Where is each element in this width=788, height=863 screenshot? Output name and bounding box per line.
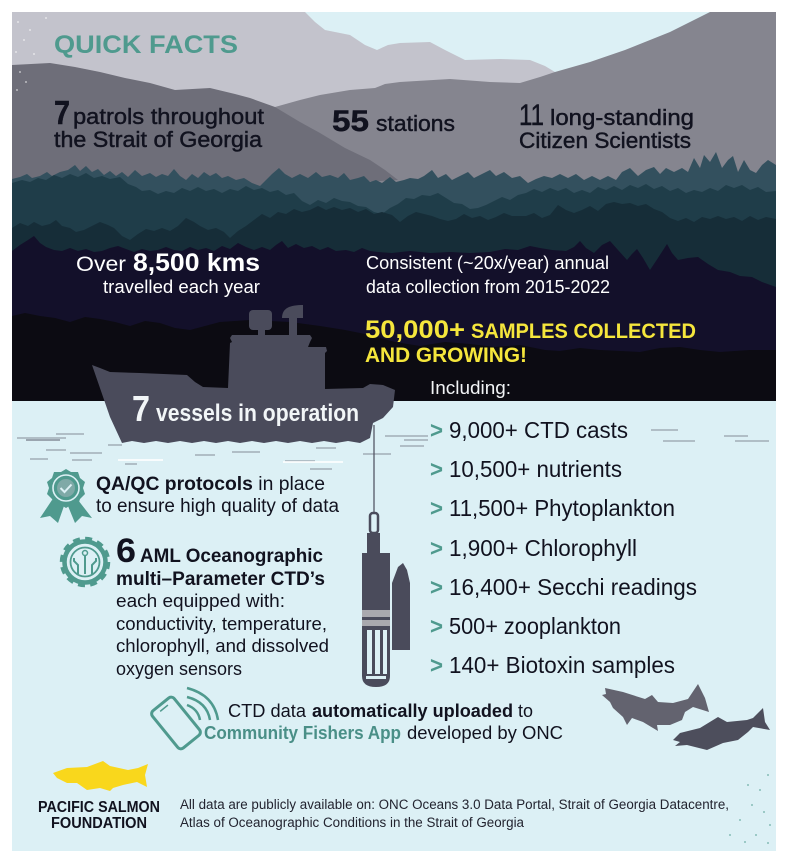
label: vessels in operation — [132, 388, 359, 429]
fact: stations — [332, 105, 455, 138]
fact: annual data collection — [366, 253, 610, 297]
text: AML CTD description — [116, 532, 329, 679]
fact: kilometres travelled: 8,500 kms — [133, 249, 260, 277]
text: CTD data upload: automatically uploaded — [312, 700, 513, 721]
text: AML CTD description: oxygen sensors — [116, 658, 242, 679]
fact: patrols: patrols throughout — [73, 104, 264, 129]
list item: zooplankton: > — [430, 613, 443, 639]
text: CTD data upload: to — [518, 700, 533, 721]
text: QA/QC protocols — [96, 474, 339, 517]
fact: samples collected: SAMPLES COLLECTED — [471, 320, 696, 343]
list item: biotoxin samples: 140+ Biotoxin samples — [449, 652, 675, 678]
text: data availability note: All data are publicly available on: ONC Oceans 3.0 Data Portal, Strait of Georgia Datacentre, — [180, 797, 729, 812]
list item: CTD casts: 9,000+ CTD casts — [449, 417, 628, 443]
text: CTD data upload: developed by ONC — [407, 722, 563, 743]
sample list — [430, 417, 697, 678]
fact: citizen scientists — [519, 99, 694, 153]
icon: CTD instrument on cable — [362, 425, 410, 687]
text: CTD data upload: Community Fishers App — [204, 722, 401, 743]
fact: samples collected: AND GROWING! — [365, 344, 527, 367]
label: including: Including: — [430, 378, 511, 398]
tree line: rear ridge — [12, 202, 776, 310]
logo text: Pacific Salmon Foundation — [38, 799, 160, 832]
list item: phytoplankton: > — [430, 495, 443, 521]
list item: secchi readings: > — [430, 574, 443, 600]
tree line: front ridge — [12, 152, 776, 310]
water — [12, 401, 776, 851]
text: AML CTD description: chlorophyll, and dissolved — [116, 635, 329, 656]
speckle texture — [15, 17, 47, 91]
logo: yellow salmon — [53, 761, 148, 791]
fact: stations: 55 — [332, 105, 369, 138]
fact: kilometres travelled: Over — [76, 253, 126, 276]
fact: kilometres travelled: travelled each year — [103, 277, 260, 297]
icon: quality rosette — [40, 469, 92, 523]
speckle texture bottom right — [729, 774, 771, 844]
fact: patrols: 7 — [54, 94, 70, 131]
list item: nutrients: 10,500+ nutrients — [449, 456, 622, 482]
fact: citizen scientists: 11 — [519, 99, 544, 132]
far mountain — [12, 12, 600, 200]
label: vessels in operation: 7 — [132, 388, 150, 429]
list item: zooplankton: 500+ zooplankton — [449, 613, 621, 639]
list item: nutrients: > — [430, 456, 443, 482]
text: AML CTD description: AML Oceanographic — [140, 546, 323, 567]
fact: annual data collection: data collection from 2015-2022 — [366, 277, 610, 297]
text: AML CTD description: conductivity, temperature, — [116, 613, 327, 634]
fact: samples collected: 50,000+ — [365, 316, 465, 344]
text: QA/QC protocols: to ensure high quality of data — [96, 496, 339, 517]
right mountain — [275, 12, 776, 220]
fact: patrols — [54, 94, 264, 152]
text: AML CTD description: multi–Parameter CTD’s — [116, 569, 325, 590]
title: QUICK FACTS — [54, 31, 238, 59]
icon: upper salmon — [602, 684, 709, 731]
fact: citizen scientists: Citizen Scientists — [519, 128, 691, 153]
fact: stations: stations — [376, 111, 455, 136]
fact: kilometres travelled — [76, 249, 260, 297]
water surface lines — [17, 430, 769, 469]
fact: samples collected — [365, 316, 696, 367]
list item: CTD casts: > — [430, 417, 443, 443]
text: AML CTD description: each equipped with: — [116, 590, 285, 611]
left mountain — [12, 63, 398, 200]
fact: citizen scientists: long-standing — [550, 105, 694, 130]
list item: chlorophyll: > — [430, 535, 443, 561]
text: data availability note: Atlas of Oceanographic Conditions in the Strait of Georgia — [180, 815, 524, 830]
list item: chlorophyll: 1,900+ Chlorophyll — [449, 535, 637, 561]
text: data availability note — [180, 797, 729, 830]
icon: phone with signal waves — [150, 688, 218, 750]
icon: vessel — [92, 305, 395, 443]
fact: patrols: the Strait of Georgia — [54, 127, 263, 152]
list item: biotoxin samples: > — [430, 652, 443, 678]
logo text: Pacific Salmon Foundation: PACIFIC SALMON — [38, 799, 160, 816]
dark shoreline band — [12, 313, 776, 402]
list item: secchi readings: 16,400+ Secchi readings — [449, 574, 697, 600]
text: AML CTD description: 6 — [116, 532, 136, 570]
icon: circuit gear — [62, 538, 108, 586]
label: vessels in operation: vessels in operation — [156, 400, 359, 427]
icon: lower salmon — [673, 708, 770, 750]
text: QA/QC protocols: QA/QC protocols in place — [96, 474, 325, 495]
logo text: Pacific Salmon Foundation: FOUNDATION — [51, 815, 147, 832]
text: CTD data upload: CTD data — [228, 700, 307, 721]
fact: annual data collection: Consistent (~20x/year) annual — [366, 253, 609, 273]
text: CTD data upload — [204, 700, 563, 743]
water highlights — [118, 460, 343, 462]
tree line: middle ridge — [12, 173, 776, 310]
night band — [12, 236, 776, 360]
list item: phytoplankton: 11,500+ Phytoplankton — [449, 495, 675, 521]
